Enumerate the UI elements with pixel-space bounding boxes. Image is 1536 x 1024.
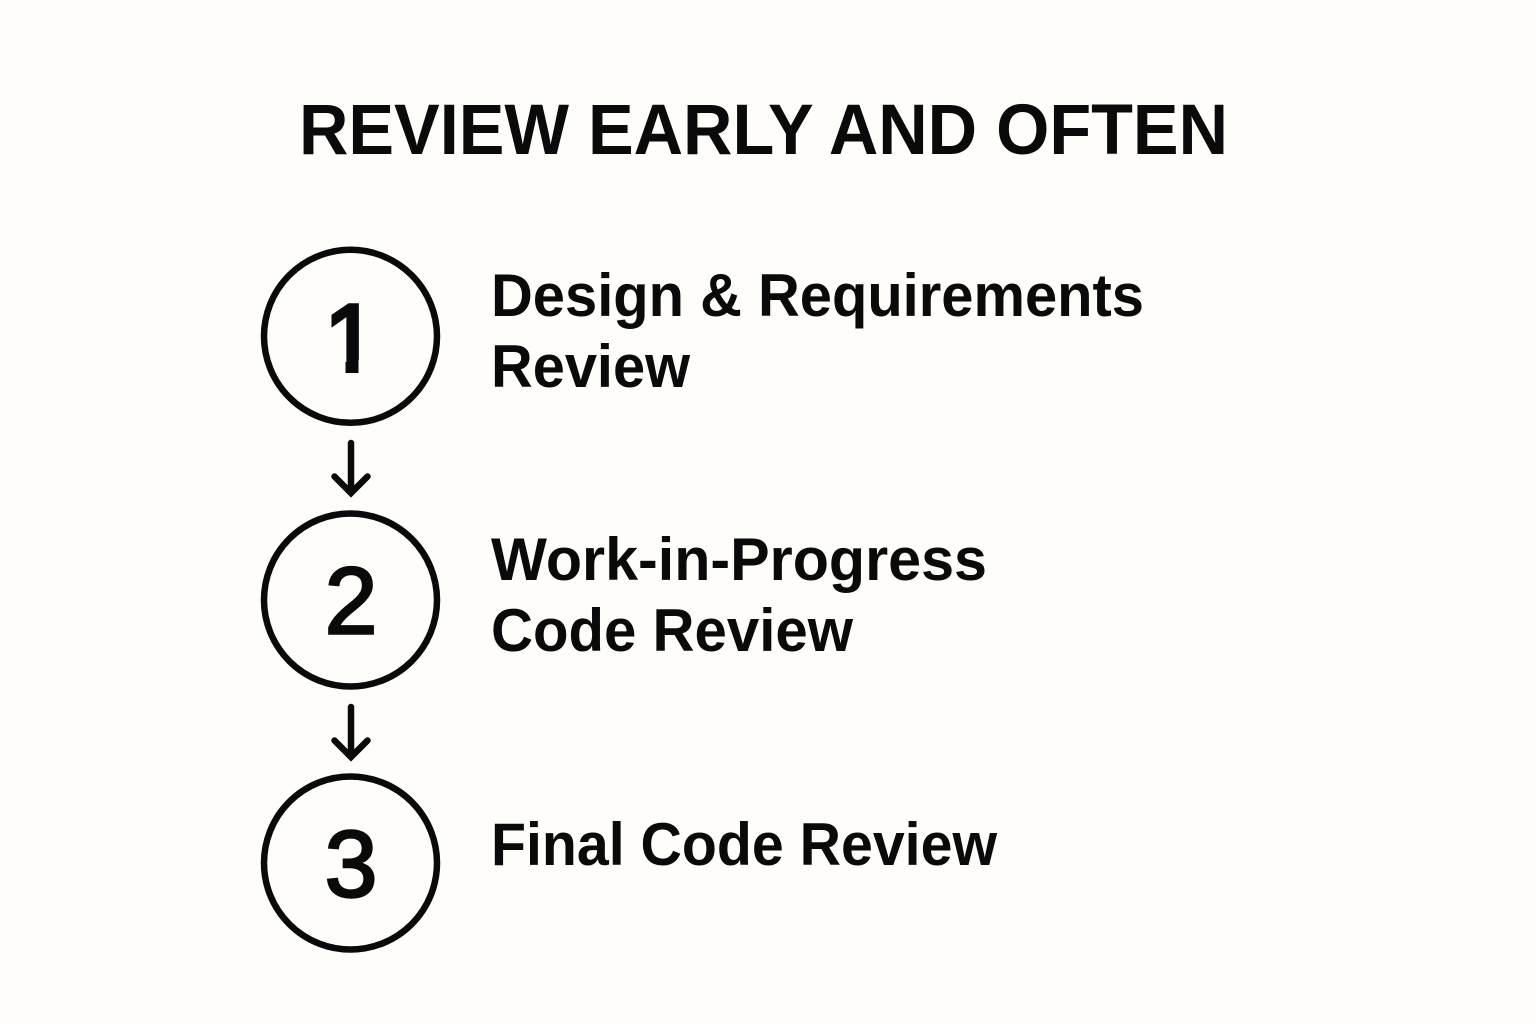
- step 1 label: [491, 262, 1144, 400]
- step 2 number: 2: [325, 548, 377, 654]
- arrow 1 to 2: [334, 443, 368, 493]
- step 2 label: [491, 526, 987, 664]
- step 3 number: 3: [325, 812, 377, 918]
- step 3: [264, 776, 997, 950]
- step 1 circle: [264, 250, 437, 423]
- step 1: [264, 250, 1144, 423]
- step 2: [264, 514, 987, 686]
- step 1 label: Review: [491, 333, 690, 400]
- step 2 label: Work-in-Progress: [491, 526, 987, 593]
- step 2 circle: [264, 514, 437, 686]
- step 2 label: Code Review: [491, 597, 853, 664]
- title: REVIEW EARLY AND OFTEN: [299, 91, 1228, 170]
- step 3 circle: [264, 776, 437, 950]
- arrow 2 to 3: [334, 707, 368, 757]
- step 3 label: Final Code Review: [491, 811, 997, 878]
- step 1 label: Design & Requirements: [491, 262, 1144, 329]
- step 1 number: 1: [324, 285, 378, 392]
